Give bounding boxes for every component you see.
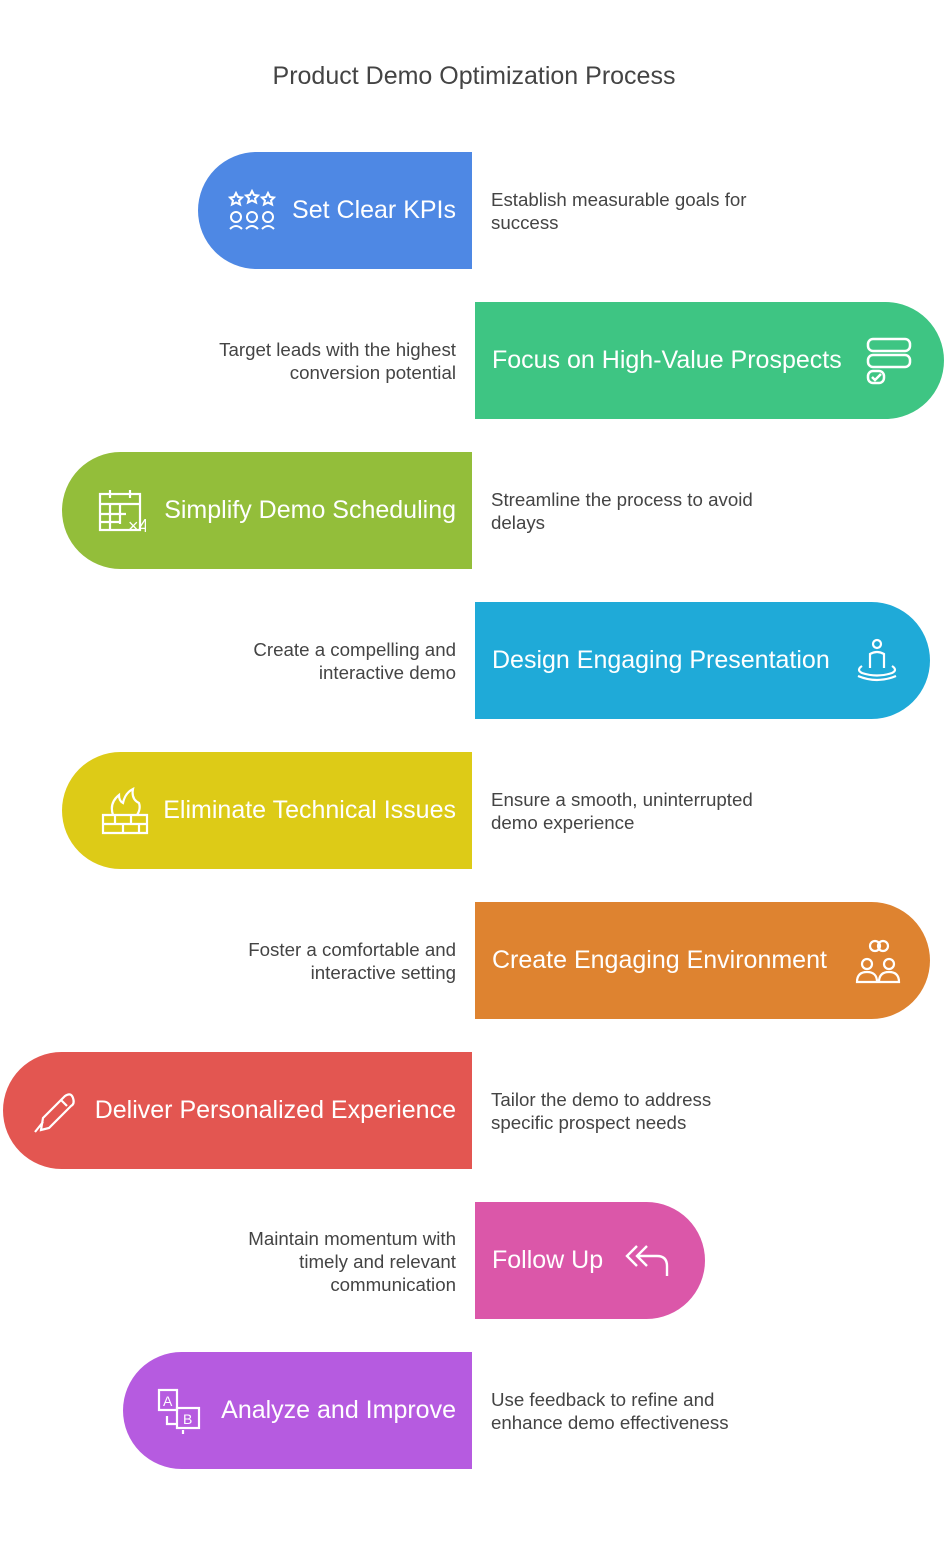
- desc 6: Foster a comfortable and: [248, 939, 456, 960]
- step 9: [123, 1352, 472, 1469]
- step 5: [62, 752, 472, 869]
- step 4: [475, 602, 930, 719]
- step 6: [475, 902, 930, 1019]
- desc 3: delays: [491, 512, 545, 533]
- desc 8: Maintain momentum with: [248, 1228, 456, 1249]
- desc 7: Tailor the demo to address: [491, 1089, 711, 1110]
- desc 1: success: [491, 212, 559, 233]
- step 3: Simplify Demo Scheduling: [164, 496, 456, 524]
- desc 9: Use feedback to refine and: [491, 1389, 714, 1410]
- title: Product Demo Optimization Process: [273, 62, 675, 90]
- desc 3: [491, 489, 753, 533]
- step 7: [3, 1052, 472, 1169]
- desc 9: [491, 1389, 729, 1433]
- desc 8: communication: [330, 1274, 456, 1295]
- desc 1: [491, 189, 747, 233]
- desc 6: [248, 939, 456, 983]
- desc 4: [253, 639, 456, 683]
- step 1: Set Clear KPIs: Set Clear KPIs: [292, 196, 456, 224]
- step 2: Focus on High-Value Prospects: [492, 346, 842, 374]
- step 7: Deliver Personalized Experience: [95, 1096, 456, 1124]
- desc 1: Establish measurable goals for: [491, 189, 747, 210]
- step 9: B: [183, 1410, 192, 1426]
- desc 6: interactive setting: [311, 962, 456, 983]
- step 8: [475, 1202, 705, 1319]
- step 3: [62, 452, 472, 569]
- desc 7: [491, 1089, 711, 1133]
- desc 4: Create a compelling and: [253, 639, 456, 660]
- step 5: Eliminate Technical Issues: [163, 796, 456, 824]
- desc 8: timely and relevant: [299, 1251, 456, 1272]
- step 8: Follow Up: [492, 1246, 603, 1274]
- desc 3: Streamline the process to avoid: [491, 489, 753, 510]
- desc 2: Target leads with the highest: [219, 339, 456, 360]
- desc 5: demo experience: [491, 812, 634, 833]
- step 6: Create Engaging Environment: [492, 946, 827, 974]
- step 9: A: [163, 1392, 173, 1408]
- step 1: Set Clear KPIs: [198, 152, 472, 269]
- desc 7: specific prospect needs: [491, 1112, 686, 1133]
- desc 2: conversion potential: [290, 362, 456, 383]
- desc 8: [248, 1228, 456, 1295]
- desc 4: interactive demo: [319, 662, 456, 683]
- desc 2: [219, 339, 456, 383]
- desc 5: Ensure a smooth, uninterrupted: [491, 789, 753, 810]
- step 9: Analyze and Improve: [221, 1396, 456, 1424]
- desc 9: enhance demo effectiveness: [491, 1412, 729, 1433]
- desc 5: [491, 789, 753, 833]
- step 4: Design Engaging Presentation: [492, 646, 830, 674]
- step 2: [475, 302, 944, 419]
